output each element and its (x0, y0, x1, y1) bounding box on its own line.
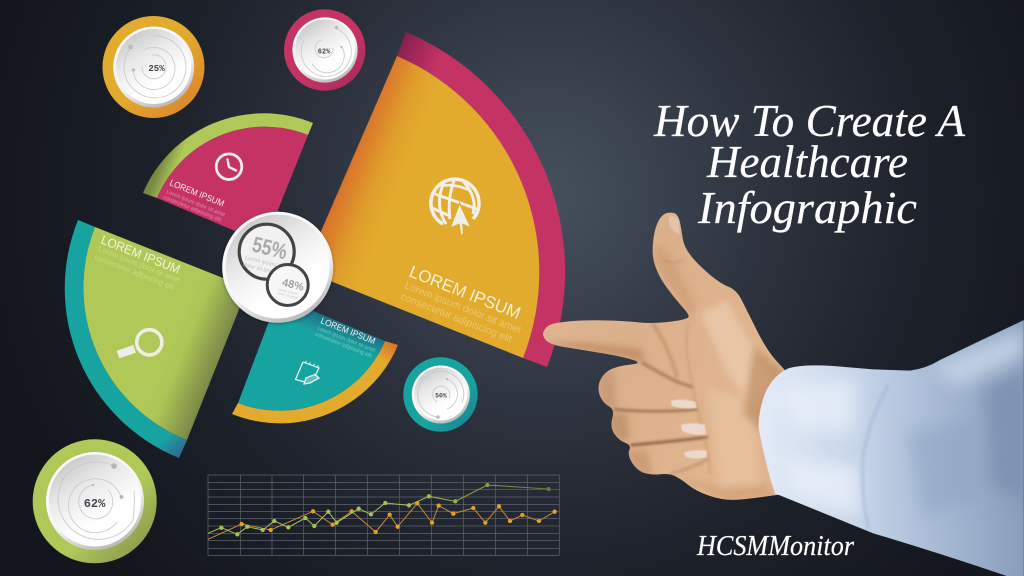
text block: orange sector: Lorem ipsum dolor sit amet (403, 280, 523, 336)
lime outer band (143, 113, 313, 198)
ring: 55% (239, 224, 294, 279)
magenta outer band (397, 32, 565, 367)
series: lime (208, 485, 549, 534)
panel: teal sector (232, 296, 398, 423)
center white circle (222, 212, 333, 323)
title: Healthcare (706, 136, 908, 187)
circle badge: 50% (403, 357, 478, 432)
ring: 55%: 55% (250, 232, 290, 264)
heading: magenta sector: LOREM IPSUM (168, 178, 226, 209)
chart grid (208, 475, 559, 555)
panel: orange sector (304, 32, 565, 367)
heading: orange sector: LOREM IPSUM (407, 262, 523, 323)
magenta sector body (157, 127, 308, 243)
title (653, 95, 966, 233)
text block: magenta sector: consectetur adipiscing elit (162, 195, 222, 224)
ring: 48%: 48% (281, 277, 305, 294)
circle badge: 50%: 50% (435, 392, 447, 400)
ring: 48%: Lorem ipsum (277, 287, 298, 296)
title: How To Create A (653, 95, 966, 146)
series: orange (208, 503, 555, 539)
heading: teal sector: LOREM IPSUM (319, 316, 377, 346)
text block: orange sector: consectetur adipiscing elit (399, 291, 514, 345)
circle badge: 25%: 25% (148, 64, 165, 74)
line chart (208, 475, 559, 555)
hand and sleeve (540, 210, 1024, 576)
teal outer band (65, 220, 187, 458)
panel: lime sector (65, 220, 248, 458)
icon: magnifier (117, 330, 162, 358)
ring: 55%: dolor sit amet (243, 262, 276, 276)
text block: teal sector: Lorem ipsum dolor sit amet (316, 326, 377, 354)
circle badge: 62% top (284, 9, 365, 91)
brand label: HCSMMonitor (696, 531, 854, 562)
fingernails (668, 216, 707, 458)
icon: notepad and pencil (296, 361, 319, 384)
orange outer band (232, 341, 398, 423)
circle badge: 62% bottom (33, 439, 157, 563)
sleeve cuff seam (863, 385, 888, 528)
text block: lime sector: Lorem ipsum dolor sit amet (97, 244, 182, 285)
circle badge: 62% top: 62% (318, 48, 331, 56)
lime sector body (83, 227, 248, 440)
teal sector body (238, 296, 385, 411)
text block: lime sector: consectetur adipiscing elit (93, 252, 176, 292)
panel: magenta sector (143, 113, 313, 243)
circle badge: 62% bottom: 62% (84, 497, 106, 511)
ring: 48%: dolor sit amet (277, 291, 299, 300)
heading: lime sector: LOREM IPSUM (99, 233, 182, 277)
icon: globe and cursor (431, 178, 479, 235)
sleeve (753, 313, 1024, 576)
title: Infographic (697, 182, 917, 233)
ring: 48% (267, 264, 308, 306)
circle badge: 25% (102, 16, 204, 118)
ring: 55%: Lorem ipsum (245, 255, 277, 269)
hand (540, 210, 800, 503)
text block: teal sector: consectetur adipiscing elit (314, 332, 373, 360)
text block: magenta sector: Lorem ipsum dolor sit amet (165, 189, 226, 219)
orange sector body (304, 56, 539, 358)
icon: clock (216, 154, 242, 180)
